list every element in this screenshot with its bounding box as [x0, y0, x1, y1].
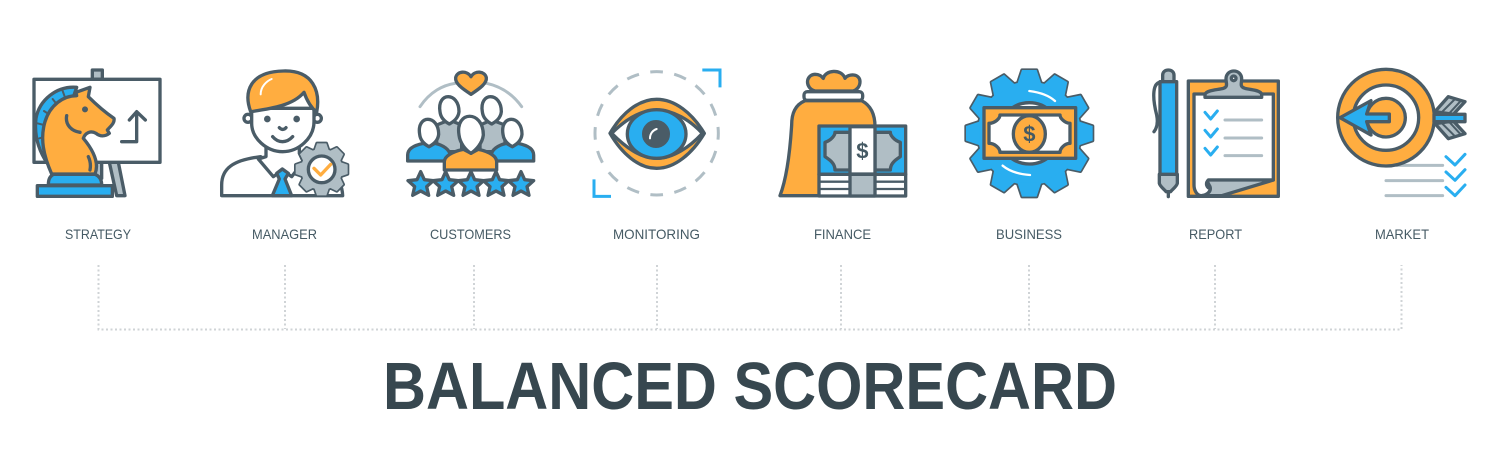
icon: report clipboard and pen: [1154, 70, 1278, 197]
title: BALANCED SCORECARD: [383, 349, 1117, 424]
icon: market target with arrow and checks: [1338, 69, 1465, 196]
icon: business gear with banknote: [966, 70, 1093, 197]
icon: finance money bag and banknotes: $: [856, 138, 868, 163]
icon: monitoring eye: [594, 70, 720, 196]
icon: customers with heart and stars: [408, 72, 534, 195]
label: customers: CUSTOMERS: [430, 226, 511, 242]
dotted connector bracket: [98, 265, 1402, 330]
label: business: BUSINESS: [996, 226, 1062, 242]
label: monitoring: MONITORING: [613, 226, 700, 242]
label: market: MARKET: [1375, 226, 1429, 242]
label: finance: FINANCE: [814, 226, 871, 242]
icon: manager with gear: [222, 71, 348, 196]
label: strategy: STRATEGY: [65, 226, 132, 242]
label: report: REPORT: [1189, 226, 1242, 242]
label: manager: MANAGER: [252, 226, 317, 242]
icon: finance money bag and banknotes: [780, 71, 906, 196]
icon: strategy chess knight and easel: [34, 70, 160, 196]
icon: business gear with banknote: $: [1023, 122, 1035, 147]
